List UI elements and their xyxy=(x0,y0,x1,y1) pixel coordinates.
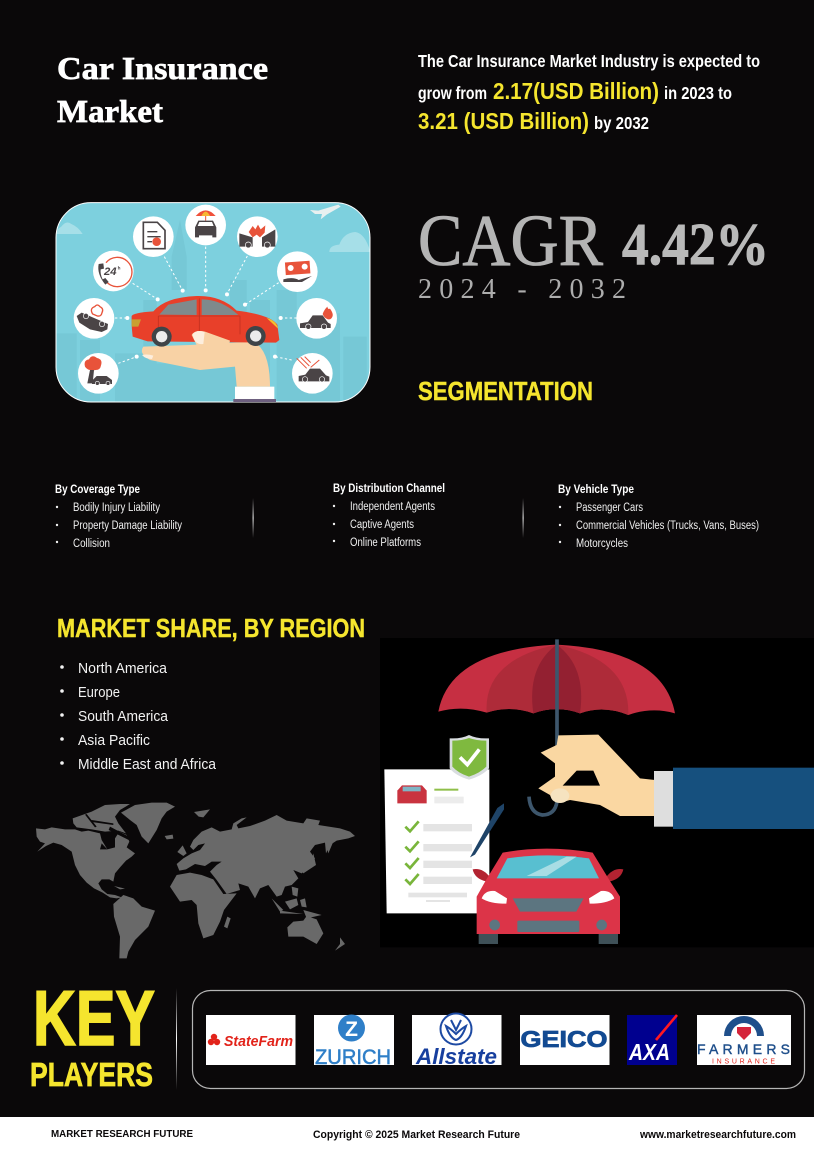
region list: North America xyxy=(78,660,168,677)
umbrella xyxy=(438,645,675,715)
icon: car collision xyxy=(237,216,278,257)
logo: Allstate: Allstate xyxy=(415,1044,497,1069)
red car front xyxy=(473,849,623,944)
thumb xyxy=(551,788,569,803)
icon: car hit by hail xyxy=(292,353,333,394)
CAGR figure: 2024 - 2032 xyxy=(418,274,626,305)
region list: Asia Pacific xyxy=(78,732,150,749)
cloud left xyxy=(57,222,83,234)
cloud right xyxy=(329,232,370,252)
icon: money in hand xyxy=(277,251,318,292)
segment column: by distribution channel: Captive Agents xyxy=(350,519,414,531)
segment column: by vehicle type: Passenger Cars xyxy=(576,502,643,514)
shield check xyxy=(450,735,489,780)
shirt cuff xyxy=(654,771,673,827)
key players panel xyxy=(192,990,804,1088)
icon: overturned car xyxy=(74,298,114,339)
market forecast statement: 3.21 (USD Billion) xyxy=(418,108,589,134)
logo: State Farm xyxy=(206,1015,296,1065)
title: Car Insurance xyxy=(57,50,268,86)
key players heading xyxy=(30,974,155,1093)
title xyxy=(57,50,268,129)
world map xyxy=(36,803,355,958)
icon: car under umbrella xyxy=(185,205,226,245)
logo: State Farm: StateFarm xyxy=(224,1033,293,1050)
hand xyxy=(538,735,655,816)
region list xyxy=(60,660,217,773)
title: Market xyxy=(57,93,163,129)
region list: Middle East and Africa xyxy=(78,756,217,773)
segment column: by vehicle type xyxy=(558,482,759,550)
market forecast statement: in 2023 to xyxy=(664,83,732,103)
icon: 24 hour phone: h xyxy=(118,265,121,270)
segment column: by distribution channel: By Distribution Channel xyxy=(333,481,445,495)
logo: AXA: AXA xyxy=(628,1039,670,1065)
thumb and shirt cuff xyxy=(142,331,276,402)
market share heading: MARKET SHARE, BY REGION xyxy=(57,613,365,643)
icon: 24 hour phone: 24 xyxy=(103,266,117,278)
segment column: by vehicle type: Motorcycles xyxy=(576,538,628,550)
icon: tree on car xyxy=(78,353,119,394)
segment column: by vehicle type: By Vehicle Type xyxy=(558,482,634,496)
logo: AXA xyxy=(627,1015,677,1065)
CAGR figure: CAGR xyxy=(418,200,603,281)
icon: car on fire xyxy=(296,298,337,339)
pen xyxy=(470,803,504,857)
hand holding car xyxy=(142,342,270,387)
illustration: car insurance coverage xyxy=(56,203,370,402)
market forecast statement: grow from xyxy=(418,83,487,103)
suit sleeve xyxy=(673,768,814,829)
footer bar: Copyright © 2025 Market Research Future xyxy=(313,1129,520,1141)
market forecast statement: by 2032 xyxy=(594,113,649,133)
key players heading: PLAYERS xyxy=(30,1056,153,1093)
segment column: by distribution channel: Independent Agents xyxy=(350,501,435,513)
CAGR figure: 4.42% xyxy=(622,211,769,277)
footer bar: MARKET RESEARCH FUTURE xyxy=(51,1128,193,1140)
logo: Zurich: ZURICH xyxy=(315,1046,391,1069)
illustration: hand holding umbrella over car xyxy=(380,638,814,947)
icon: policy document xyxy=(133,216,174,257)
segment column: by distribution channel: Online Platforms xyxy=(350,537,421,549)
icon: 24 hour phone xyxy=(93,251,134,291)
segment column: by coverage type: Property Damage Liability xyxy=(73,520,182,532)
logo: Zurich xyxy=(314,1014,394,1069)
city skyline xyxy=(172,228,186,256)
segmentation heading: SEGMENTATION xyxy=(418,376,593,406)
airplane xyxy=(310,205,341,219)
dashed connector lines xyxy=(115,247,297,363)
segment column: by coverage type: Bodily Injury Liability xyxy=(73,502,160,514)
insurance document xyxy=(384,769,489,913)
segment column: by distribution channel xyxy=(333,481,445,549)
umbrella handle xyxy=(529,639,557,815)
CAGR figure xyxy=(418,200,769,305)
logo: GEICO: GEICO xyxy=(520,1026,608,1052)
logo: Farmers Insurance xyxy=(697,1015,791,1066)
logo: Farmers Insurance: INSURANCE xyxy=(712,1058,775,1066)
logo: Zurich: Z xyxy=(345,1018,358,1041)
market forecast statement xyxy=(418,51,760,134)
market forecast statement: 2.17(USD Billion) xyxy=(493,78,659,104)
footer bar xyxy=(0,1117,814,1150)
segment column: by vehicle type: Commercial Vehicles (Trucks, Vans, Buses) xyxy=(576,520,759,532)
logo: GEICO xyxy=(520,1015,610,1065)
key players heading: KEY xyxy=(33,974,155,1062)
red car on hand xyxy=(132,296,279,347)
segment column: by coverage type: Collision xyxy=(73,538,110,550)
footer bar: www.marketresearchfuture.com xyxy=(639,1129,796,1141)
region list: Europe xyxy=(78,684,120,701)
logo: Farmers Insurance: FARMERS xyxy=(697,1041,790,1057)
segment column: by coverage type: By Coverage Type xyxy=(55,482,140,496)
segment column: by coverage type xyxy=(55,482,182,550)
region list: South America xyxy=(78,708,169,725)
logo: Allstate xyxy=(412,1014,502,1069)
map cut-outs xyxy=(85,814,130,849)
